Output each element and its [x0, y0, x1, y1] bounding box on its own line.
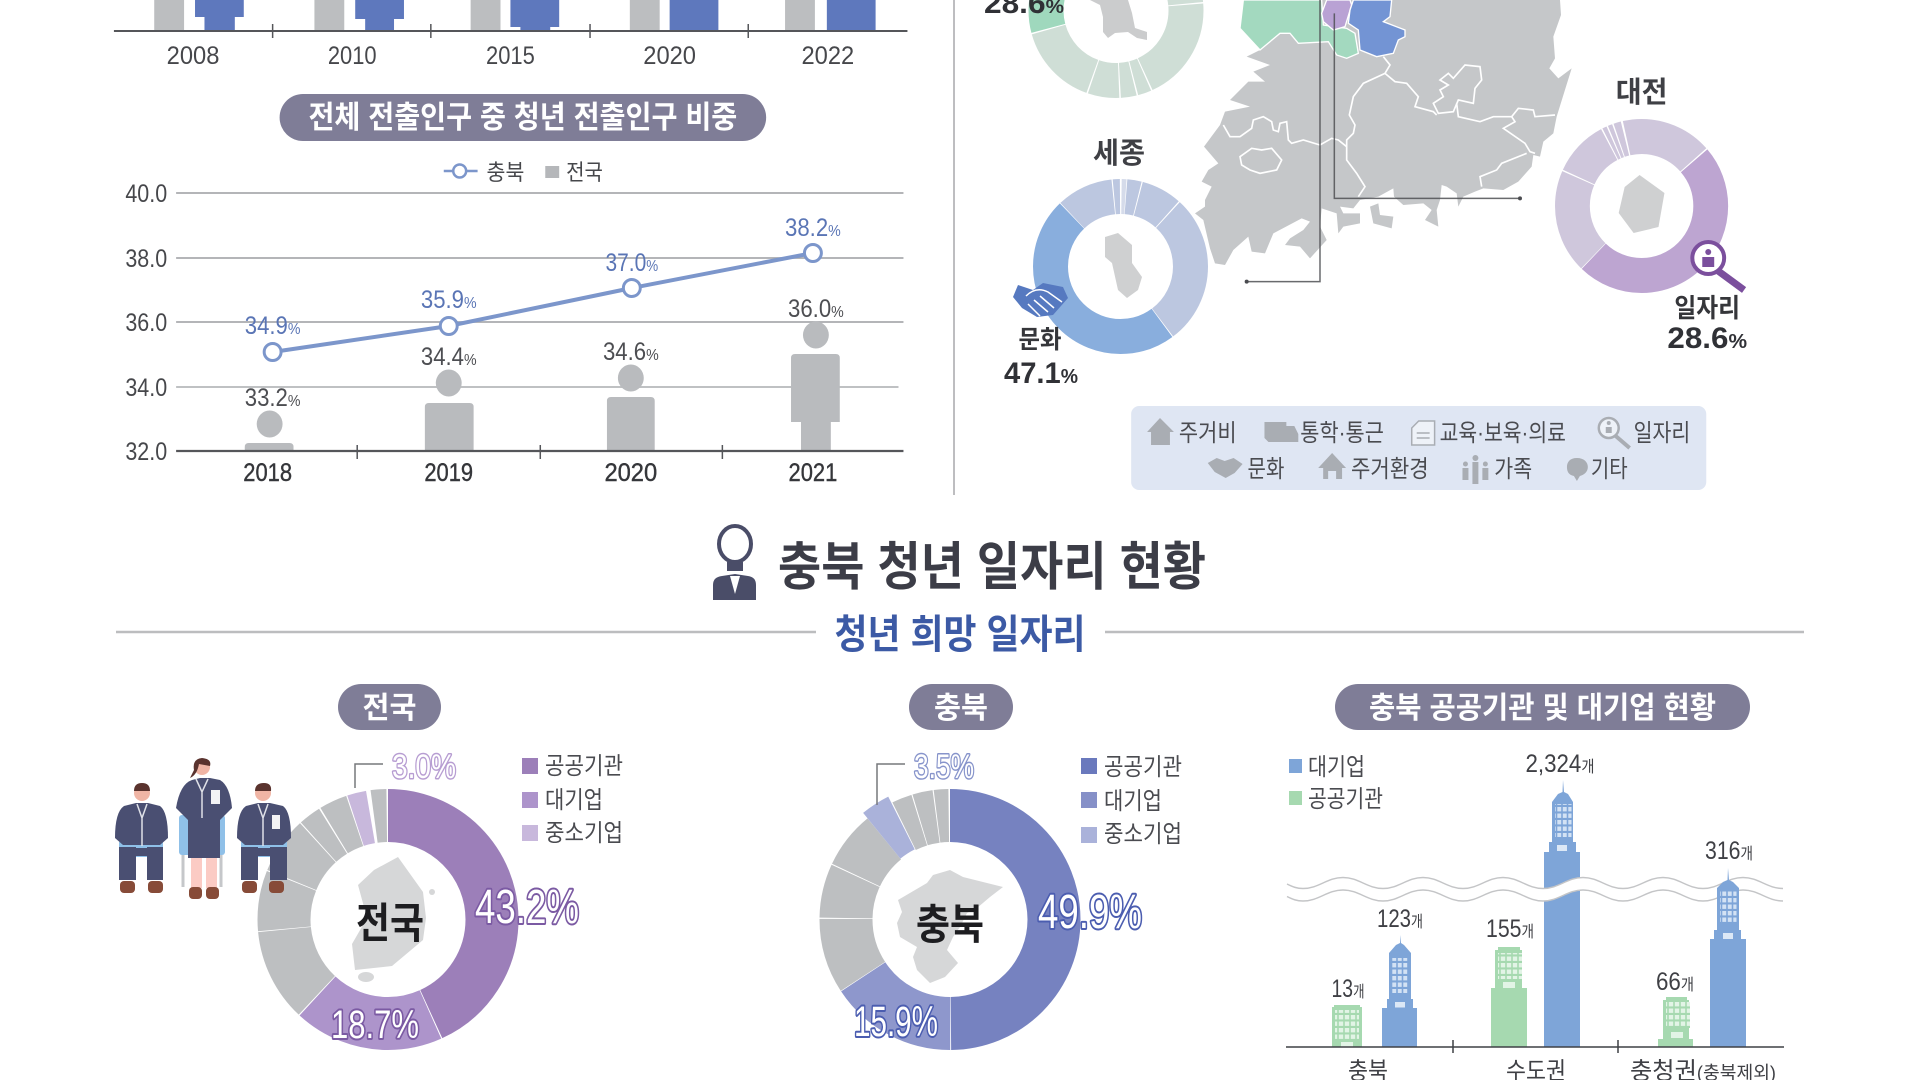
axis and labels: 123개	[1377, 905, 1423, 933]
panel: public institutions and large firms	[1286, 684, 1784, 1080]
left top panel: charts	[114, 0, 954, 495]
line and person chart: 34.9%	[245, 312, 300, 340]
legend box: categories: 교육·보육·의료	[1440, 420, 1566, 447]
heading pill	[1335, 684, 1750, 730]
legend	[1289, 754, 1383, 813]
bar chart: population by year: 2008	[167, 42, 219, 70]
value labels: 43.2%	[475, 881, 579, 934]
donut chart	[284, 816, 492, 1024]
donut: 대전	[1559, 77, 1747, 355]
axis and labels: 66개	[1656, 968, 1694, 996]
line and person chart: 32.0	[125, 438, 167, 466]
legend box: categories: 일자리	[1634, 420, 1690, 447]
line and person chart: 2021	[789, 459, 837, 487]
legend box: categories: 기타	[1591, 456, 1628, 483]
section title: 충북 청년 일자리 현황	[778, 539, 1206, 597]
panel: 전국 donut: 전국	[356, 900, 424, 947]
axis and labels: 13개	[1332, 975, 1364, 1003]
donut: 대전: 28.6%	[1667, 322, 1747, 355]
line and person chart: 35.9%	[421, 286, 477, 314]
line and person chart: 36.0	[125, 309, 167, 337]
line and person chart: 2018	[243, 459, 292, 487]
legend: line chart	[444, 160, 603, 185]
legend box: categories: 주거비	[1179, 420, 1237, 447]
tallest building: 충청권	[1710, 868, 1746, 1047]
legend box: categories: 통학·통근	[1300, 420, 1384, 447]
donut: 대전: 일자리	[1674, 294, 1740, 323]
line and person chart: 2020	[604, 459, 657, 487]
map thumbnail: 전국	[352, 857, 435, 982]
axis and labels: 155개	[1486, 915, 1534, 943]
legend	[522, 753, 623, 847]
legend box: categories: 문화	[1248, 456, 1284, 483]
heading pill: 전국	[338, 684, 441, 730]
legend: 공공기관	[1308, 786, 1383, 813]
donut: 세종: 문화	[1018, 326, 1062, 354]
bar chart: population by year: 2020	[643, 42, 696, 70]
icon: seated people	[115, 758, 291, 899]
line and person chart: 38.0	[125, 245, 167, 273]
value labels	[331, 748, 579, 1047]
donut: 세종: 세종	[1093, 137, 1145, 170]
donut chart	[842, 812, 1058, 1028]
panel: 충북 donut: 충북	[916, 901, 984, 948]
legend: 공공기관	[545, 753, 623, 780]
axis break waves	[1287, 878, 1783, 901]
line and person chart	[125, 180, 903, 487]
line and person chart: 33.2%	[245, 384, 300, 412]
panel: 충북 donut	[842, 684, 1182, 1046]
value labels: 3.5%	[914, 748, 974, 786]
line and person chart: 34.4%	[421, 343, 477, 371]
line and person chart: 40.0	[125, 180, 167, 208]
value labels: 49.9%	[1038, 886, 1142, 939]
value labels	[854, 748, 1142, 1046]
legend box: categories	[1131, 406, 1706, 490]
value labels: 15.9%	[854, 998, 938, 1046]
bar chart: population by year: 2010	[328, 42, 377, 70]
icon: lightbulb head with suit	[713, 526, 756, 600]
legend: 중소기업	[545, 820, 623, 847]
line and person chart: 34.0	[125, 374, 167, 402]
line and person chart: 38.2%	[785, 214, 841, 242]
legend: 대기업	[1308, 754, 1365, 781]
map thumbnail: 충북	[897, 870, 1003, 983]
value labels: 3.0%	[392, 748, 456, 786]
legend: line chart: 전국	[566, 160, 603, 185]
legend: 대기업	[545, 787, 603, 814]
map of south Korea	[1195, 0, 1572, 284]
panel: 전국 donut	[115, 684, 623, 1047]
heading pill: 전국: 전국	[362, 692, 416, 725]
legend	[1081, 754, 1182, 848]
line and person chart: 37.0%	[605, 249, 658, 277]
subtitle with rules: 청년 희망 일자리	[834, 613, 1086, 657]
legend: line chart: 충북	[487, 160, 524, 185]
section title	[713, 526, 1206, 600]
heading pill: youth out-migration share: 전체 전출인구 중 청년 전출인구 비중	[308, 100, 737, 135]
value labels: 18.7%	[331, 1003, 419, 1047]
heading pill: youth out-migration share	[280, 94, 766, 141]
legend: 대기업	[1104, 788, 1162, 815]
bar chart: population by year: 2015	[486, 42, 535, 70]
bar chart: population by year: 2022	[801, 42, 854, 70]
heading pill: 충북 공공기관 및 대기업 현황	[1369, 692, 1716, 725]
legend box: categories: 주거환경	[1351, 456, 1429, 483]
legend box: categories: 가족	[1494, 456, 1532, 483]
line and person chart: 2019	[424, 459, 473, 487]
axis and labels: 2,324개	[1526, 750, 1594, 778]
bar chart: population by year	[114, 0, 907, 70]
donut: top region (partly cropped)	[984, 0, 1186, 80]
axis and labels	[1286, 750, 1784, 1080]
heading pill: 충북	[909, 684, 1013, 730]
axis and labels: 316개	[1705, 837, 1753, 865]
donut: 세종: 47.1%	[1004, 357, 1078, 390]
building bars	[1332, 780, 1693, 1047]
heading pill: 충북: 충북	[934, 692, 988, 725]
icon: magnifier	[1692, 242, 1744, 290]
legend: 공공기관	[1104, 754, 1182, 781]
line and person chart: 36.0%	[788, 295, 844, 323]
icon: handshake	[1013, 283, 1068, 317]
legend: 중소기업	[1104, 821, 1182, 848]
donut: 세종	[1004, 137, 1190, 390]
donut: 대전: 대전	[1616, 77, 1667, 109]
line and person chart: 34.6%	[603, 338, 659, 366]
